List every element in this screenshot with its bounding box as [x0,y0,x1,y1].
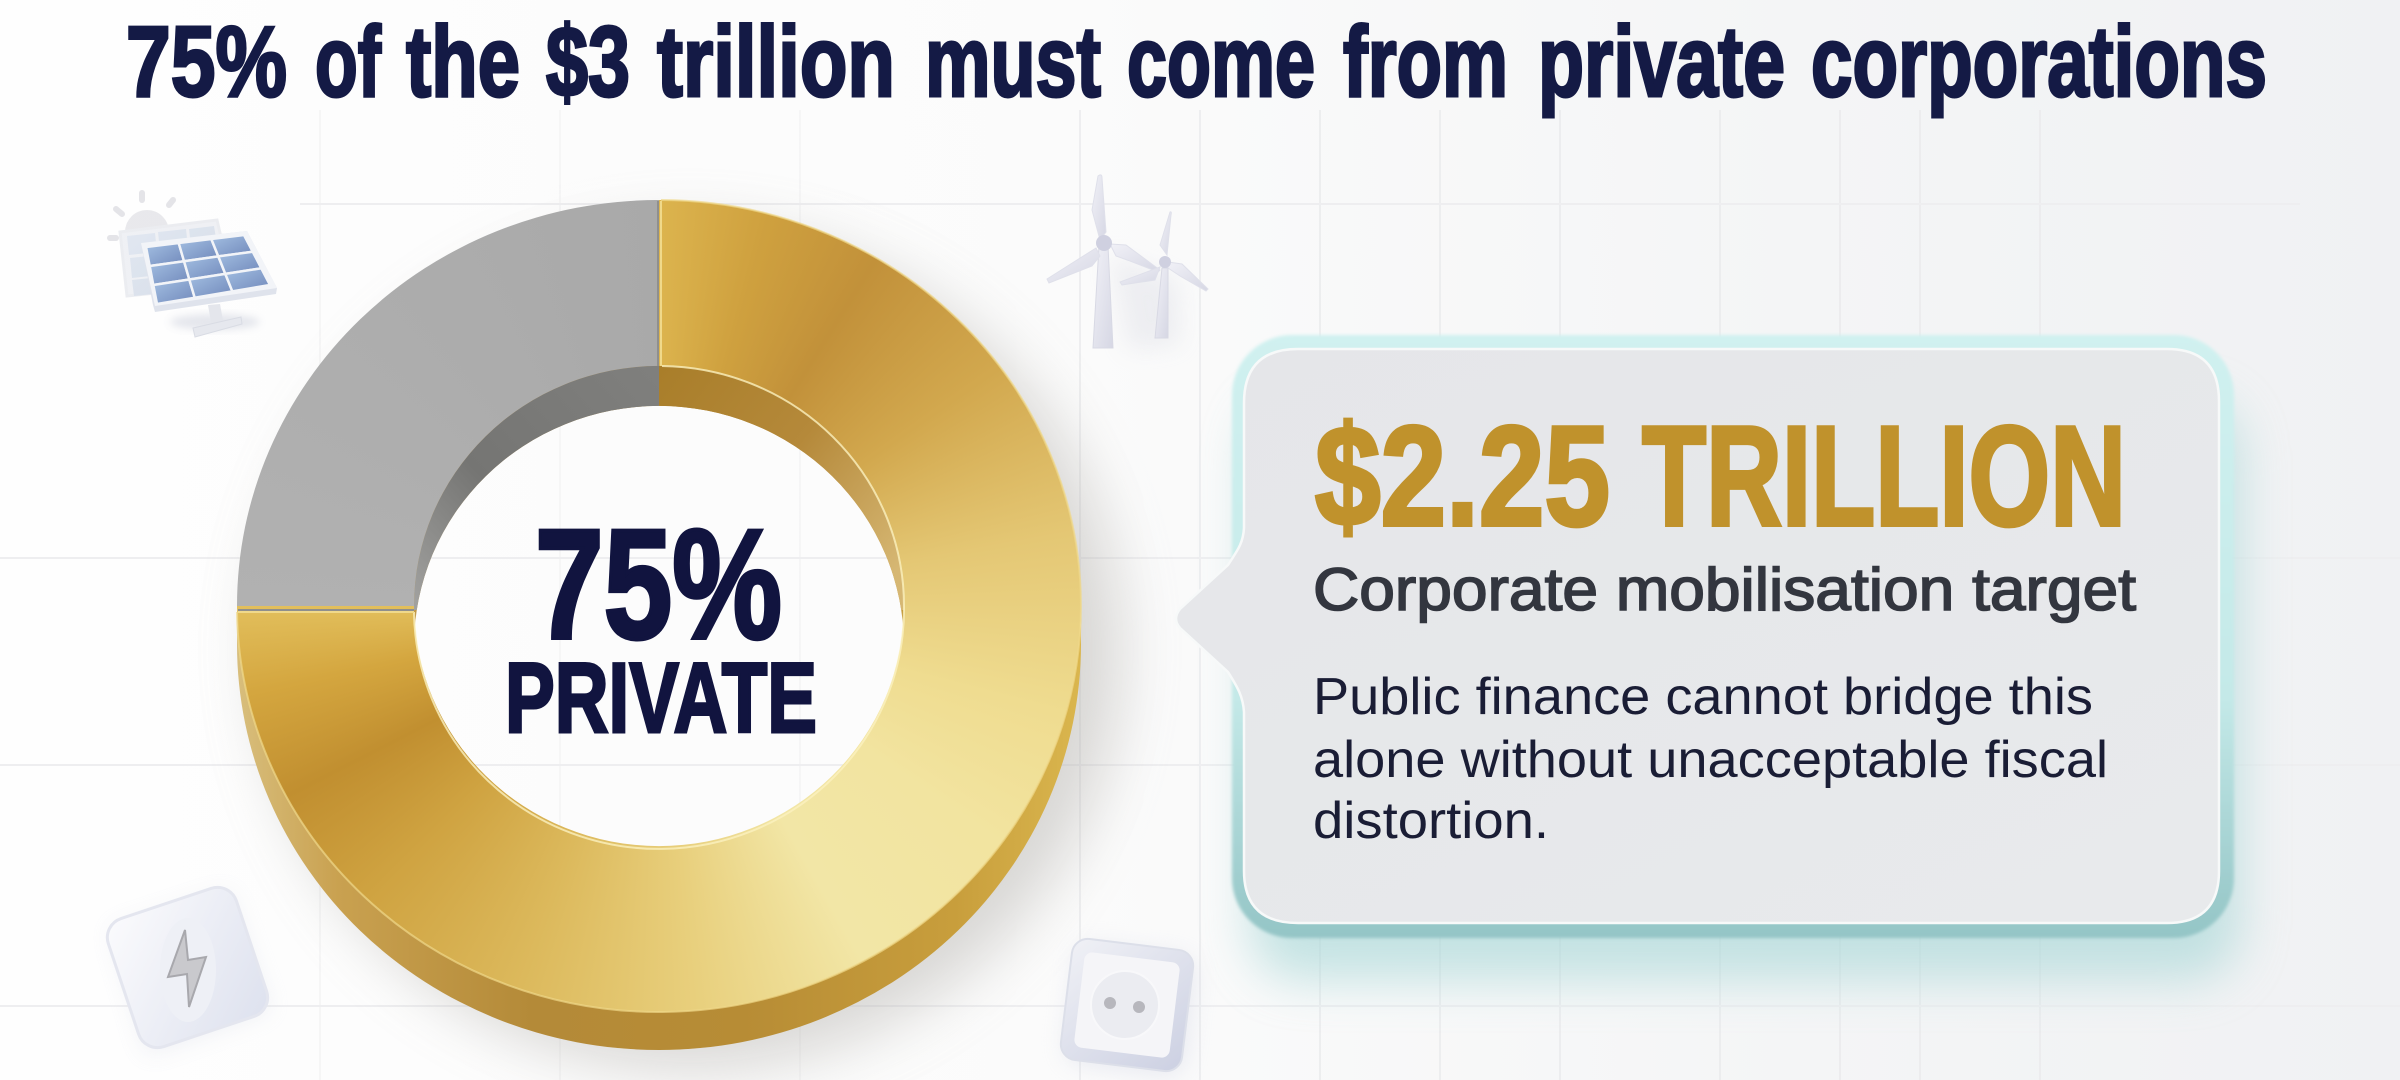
body text: Public finance cannot bridge this [1313,668,2093,726]
icon: lightning tile [102,882,273,1054]
center label: 75% [535,498,782,672]
teal glow [1250,400,2240,980]
inner wall: grey [414,366,659,610]
amount: TRILLION [1642,397,2126,556]
icon: power socket [1059,937,1197,1077]
amount [1315,397,2126,556]
title: private [1538,6,1785,118]
title: must [925,6,1101,118]
rim highlights [237,200,1081,1012]
title: come [1127,6,1315,118]
top surface: gold and grey segments [237,200,1081,1012]
inner wall: gold [659,366,904,610]
title [126,6,2267,118]
icon: solar panel [110,193,277,337]
small turbine [1120,212,1208,338]
callout card [1176,335,2240,980]
title: of [315,6,381,118]
body text [1313,668,2108,850]
amount: $2.25 [1315,397,1610,556]
extruded side wall [237,238,1081,1050]
card body with pointer [1176,349,2219,923]
center label [505,498,817,753]
donut chart: 75% private [237,200,1081,1050]
title: $3 [546,6,630,118]
body text: distortion. [1313,792,1549,850]
large turbine [1047,175,1160,348]
body text: alone without unacceptable fiscal [1313,731,2108,789]
title: trillion [657,6,895,118]
title: from [1343,6,1508,118]
title: the [406,6,520,118]
donut shadow [260,230,1120,1070]
title: 75% [126,6,287,118]
subheading: Corporate mobilisation target [1313,556,2136,623]
icon: wind turbines [1047,175,1208,350]
center label: PRIVATE [505,642,817,753]
